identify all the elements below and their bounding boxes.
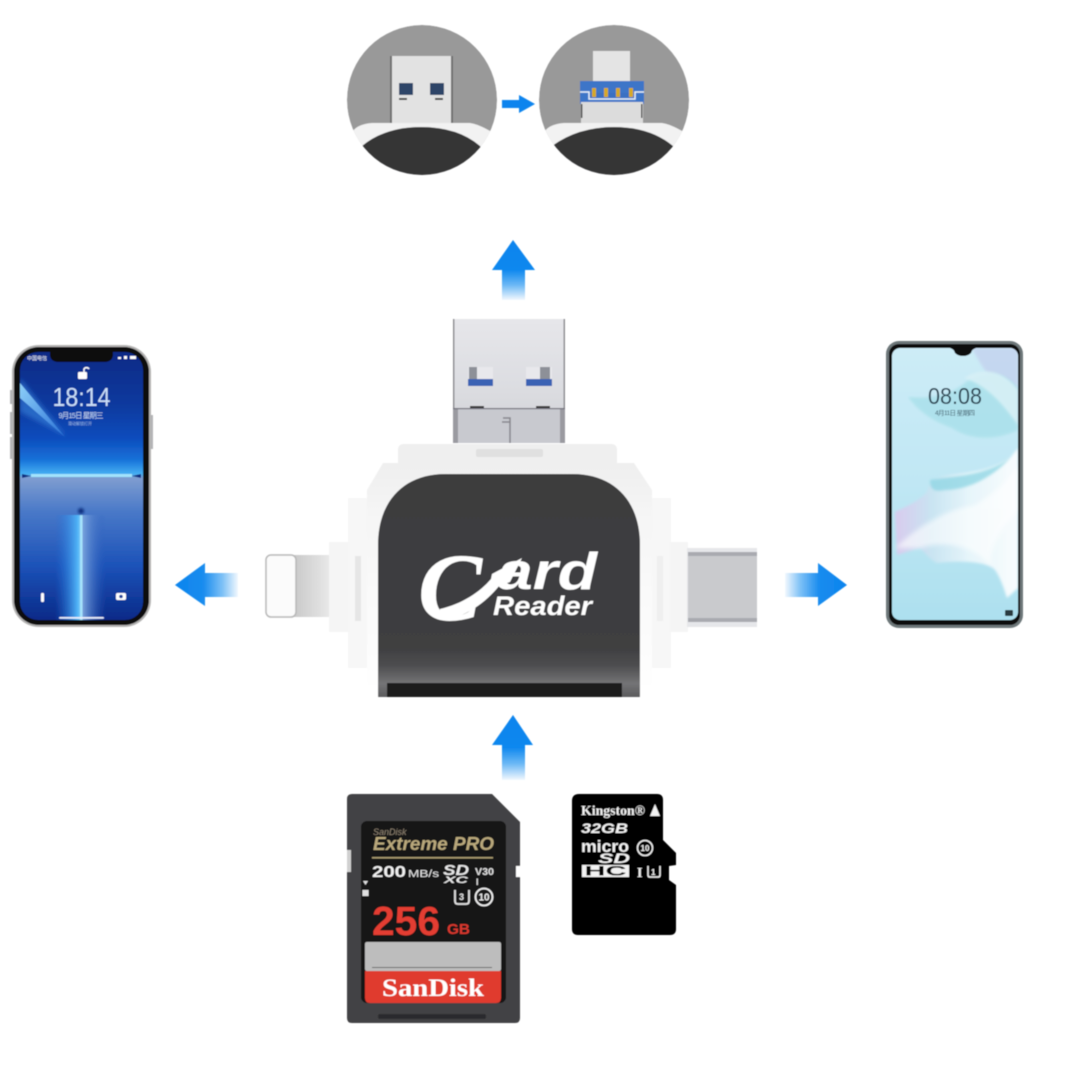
date: 9月15日 星期三 bbox=[58, 411, 104, 420]
panel: USB-A to Type-C conversion circles bbox=[345, 25, 692, 180]
flashlight icon bbox=[41, 593, 44, 602]
black face bbox=[378, 474, 640, 697]
logo: Card Reader bbox=[418, 534, 599, 641]
class 10 mark bbox=[638, 840, 652, 856]
folding lower shell bbox=[457, 409, 561, 443]
camera icon bbox=[116, 593, 126, 600]
card body bbox=[347, 794, 520, 1023]
UHS mark bbox=[637, 866, 660, 881]
speed: 200 bbox=[372, 864, 406, 881]
white collar bbox=[545, 122, 682, 161]
capacity: 256 bbox=[372, 898, 440, 944]
SanDisk SD card bbox=[347, 794, 520, 1023]
white shell bbox=[329, 444, 688, 697]
USB-A plug bbox=[390, 56, 453, 126]
lock hint: 滑动解锁打开 bbox=[68, 420, 92, 426]
HC box: HC bbox=[584, 862, 626, 878]
notch bbox=[50, 350, 113, 362]
iPhone on the left bbox=[10, 345, 153, 627]
V30: I bbox=[476, 877, 479, 887]
circle: Type-C connector position bbox=[537, 25, 692, 180]
USB port windows bbox=[468, 367, 552, 386]
logo: C, ard: ard bbox=[497, 543, 599, 601]
Kingston microSD card bbox=[572, 794, 676, 935]
class 10 mark: 10 bbox=[478, 892, 490, 904]
triangle mark bbox=[650, 804, 660, 816]
class 10 mark: 10 bbox=[641, 844, 650, 853]
arrow: up from memory cards bbox=[492, 715, 533, 780]
HC box bbox=[582, 862, 629, 878]
clock: 08:08 bbox=[928, 383, 982, 409]
clock: 18:14 bbox=[52, 382, 110, 412]
card body bbox=[572, 794, 676, 935]
Type-C plug with blue tongue bbox=[580, 51, 644, 126]
capacity: 32GB bbox=[581, 820, 628, 836]
black body bbox=[554, 126, 674, 176]
U3 mark bbox=[455, 890, 469, 904]
dark label bbox=[361, 821, 506, 1003]
arrow: between circles bbox=[502, 95, 535, 113]
arrow: right to Android phone bbox=[785, 563, 847, 606]
Type-C connector, right bbox=[687, 548, 757, 627]
logo: Reader: Reader bbox=[493, 591, 594, 621]
micro SD logo: micro bbox=[581, 837, 629, 856]
camera notch bbox=[950, 348, 976, 356]
UHS mark: 1 bbox=[651, 868, 656, 877]
SD card slot bbox=[387, 683, 622, 697]
lock screen wallpaper bbox=[20, 352, 143, 620]
V30 bbox=[475, 867, 494, 887]
lock screen wallpaper bbox=[892, 348, 1018, 620]
arrow: left to iPhone bbox=[175, 563, 238, 606]
arrow: up to circles bbox=[492, 240, 535, 300]
UHS mark: I bbox=[637, 866, 642, 881]
class 10 mark bbox=[476, 888, 492, 906]
SDXC logo: XC bbox=[442, 875, 469, 885]
Kingston brand: Kingston® bbox=[581, 804, 646, 819]
Lightning connector, left bbox=[266, 555, 329, 617]
date: 4月11日 星期四 bbox=[935, 409, 975, 417]
brand small: SanDisk bbox=[373, 827, 407, 837]
status bar: 中国电信 bbox=[27, 355, 47, 362]
home indicator bbox=[59, 617, 104, 619]
U3 mark: 3 bbox=[459, 892, 464, 902]
micro SD logo: SD bbox=[598, 850, 630, 866]
red brand band bbox=[365, 971, 501, 1003]
SDXC logo bbox=[442, 862, 469, 885]
Android phone on the right bbox=[886, 341, 1023, 628]
micro SD logo bbox=[581, 837, 630, 866]
USB-A plug, top bbox=[453, 319, 565, 443]
phone frame bbox=[886, 341, 1023, 628]
Extreme PRO: Extreme PRO bbox=[373, 834, 494, 854]
status bar bbox=[27, 355, 136, 362]
SanDisk brand: SanDisk bbox=[382, 975, 484, 1002]
V30: V30 bbox=[475, 867, 494, 878]
write lock bbox=[362, 881, 368, 896]
SanDisk SD card: GB bbox=[447, 921, 470, 938]
gray label area bbox=[365, 942, 501, 971]
SanDisk SD card: MB/s bbox=[408, 869, 439, 880]
black body bbox=[362, 126, 481, 176]
side buttons bbox=[10, 390, 153, 459]
card reader device bbox=[266, 319, 757, 697]
phone frame bbox=[12, 345, 151, 627]
SDXC logo: SD bbox=[443, 862, 469, 879]
logo: C, ard: C bbox=[418, 534, 483, 641]
lock icon bbox=[78, 368, 89, 379]
camera icon bbox=[1005, 610, 1013, 616]
white collar bbox=[353, 122, 490, 172]
logo swoosh bbox=[440, 558, 522, 620]
circle: USB-A connector position bbox=[345, 25, 500, 180]
